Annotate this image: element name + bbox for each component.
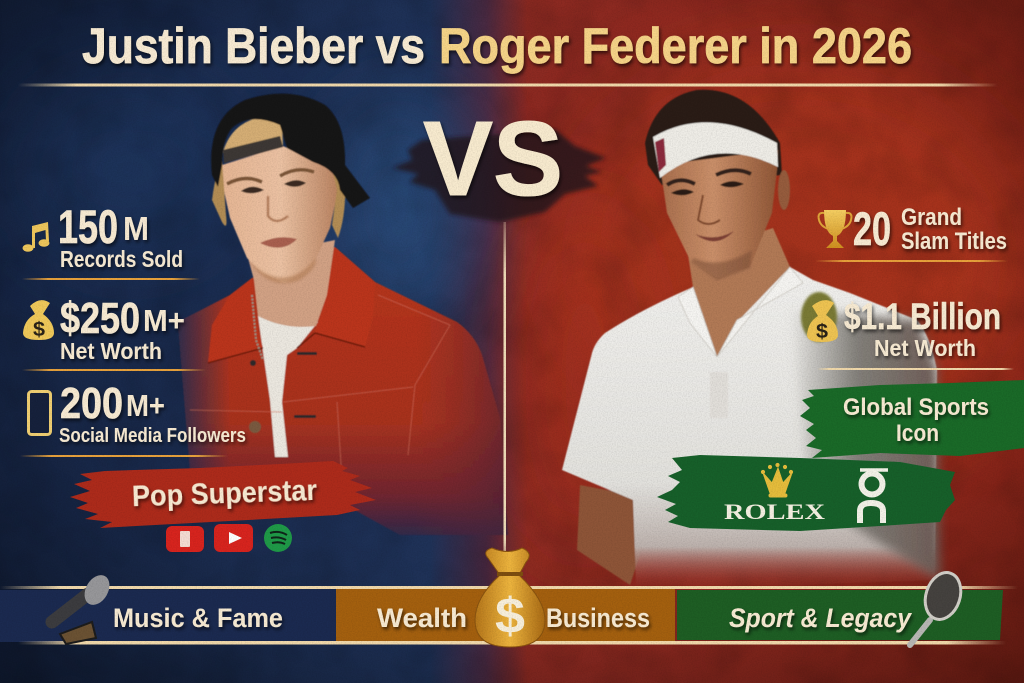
- label: wealth: Wealth: [377, 603, 467, 633]
- necklace: [252, 295, 263, 360]
- jacket: [170, 245, 515, 540]
- label: music and fame: Music & Fame: [113, 603, 283, 633]
- VS ink splash: [393, 130, 606, 222]
- collar: [678, 267, 803, 357]
- panel: Federer stats: [801, 202, 1014, 370]
- stat: followers: Social Media Followers: [59, 424, 246, 447]
- icon: money bag: [23, 300, 54, 341]
- neck: [248, 240, 335, 327]
- collars: [208, 247, 375, 363]
- icons: music platforms: [166, 524, 292, 552]
- banner: Global Sports Icon: Icon: [896, 420, 939, 447]
- label: business: Business: [546, 603, 650, 633]
- buttons: [249, 352, 317, 433]
- neck: [688, 228, 790, 357]
- stat: grand slam titles: Grand: [901, 204, 962, 231]
- panel: music and fame: [0, 590, 336, 642]
- stat: records sold: Records Sold: [60, 246, 183, 272]
- stat: followers: [59, 379, 246, 447]
- panel: sport and legacy: [677, 590, 1003, 640]
- banner: sponsors: [657, 455, 955, 531]
- eyes and brows: [241, 180, 306, 193]
- stat: records sold: [58, 200, 183, 272]
- icon: microphone: [52, 571, 115, 644]
- banner: Global Sports Icon: Global Sports: [843, 394, 989, 421]
- portrait: Justin Bieber: [170, 94, 515, 540]
- banner: Pop Superstar: [70, 461, 376, 528]
- icon: music note: [22, 222, 50, 252]
- stat: records sold: 150: [58, 200, 118, 253]
- icon: phone: [28, 392, 50, 434]
- stat: followers: M+: [126, 388, 165, 423]
- stat: grand slam titles: [853, 202, 1007, 255]
- hair: [212, 160, 345, 238]
- bottom band: [0, 548, 1018, 647]
- hair: [645, 90, 782, 185]
- nose and mouth: [698, 195, 720, 224]
- arm: [577, 485, 640, 585]
- jacket seams: [190, 295, 450, 480]
- stat: net worth: [60, 294, 185, 364]
- title: Roger Federer in 2026: [439, 18, 912, 74]
- Rolex wordmark: ROLEX: [724, 499, 825, 524]
- title: Justin Bieber vs: [82, 18, 425, 74]
- shirt: [562, 267, 937, 585]
- stat: net worth: M+: [143, 303, 185, 338]
- face: [222, 146, 340, 283]
- stat: followers: 200: [60, 379, 123, 428]
- icon: money bag: $: [33, 319, 45, 341]
- panel: wealth and business: [336, 589, 675, 642]
- icon: On logo: [860, 470, 888, 523]
- rule: [815, 260, 1008, 262]
- nose and mouth: [268, 196, 288, 221]
- stat: grand slam titles: Slam Titles: [901, 228, 1007, 255]
- headband: [653, 122, 778, 178]
- center divider: [504, 222, 506, 574]
- icon: money bag on smudge: $: [816, 321, 828, 343]
- icon: money bag on smudge: [801, 292, 838, 343]
- rule: [817, 368, 1014, 370]
- icon: money bag: [475, 548, 545, 647]
- ear: [778, 170, 790, 210]
- rule: [22, 369, 206, 371]
- stat: records sold: M: [123, 210, 149, 247]
- eyes and brows: [671, 181, 744, 195]
- banner: Global Sports Icon: [800, 380, 1024, 458]
- icon: money bag: $: [495, 588, 525, 644]
- banner: Pop Superstar: Pop Superstar: [131, 474, 318, 513]
- icon: trophy: [819, 210, 851, 248]
- panel: Bieber stats: [20, 200, 246, 457]
- portrait: Roger Federer: [562, 90, 940, 585]
- stat: net worth: [844, 296, 1001, 361]
- stat: net worth: $250: [60, 294, 140, 343]
- face: [660, 150, 778, 278]
- rule: [20, 455, 228, 457]
- cap: [211, 94, 370, 208]
- icon: Rolex crown: [761, 463, 793, 497]
- VS: VS: [423, 100, 563, 218]
- t-shirt: [258, 316, 318, 457]
- title: [82, 18, 912, 74]
- stat: net worth: Net Worth: [60, 338, 162, 364]
- rules: [0, 586, 1018, 644]
- stat: grand slam titles: 20: [853, 202, 891, 255]
- title rule: [18, 84, 998, 86]
- placket: [710, 372, 728, 418]
- label: sport and legacy: Sport & Legacy: [729, 603, 913, 633]
- rule: [22, 278, 200, 280]
- icon: tennis racket: [910, 568, 967, 645]
- headband logo: [655, 138, 666, 172]
- stat: net worth: Net Worth: [874, 335, 976, 361]
